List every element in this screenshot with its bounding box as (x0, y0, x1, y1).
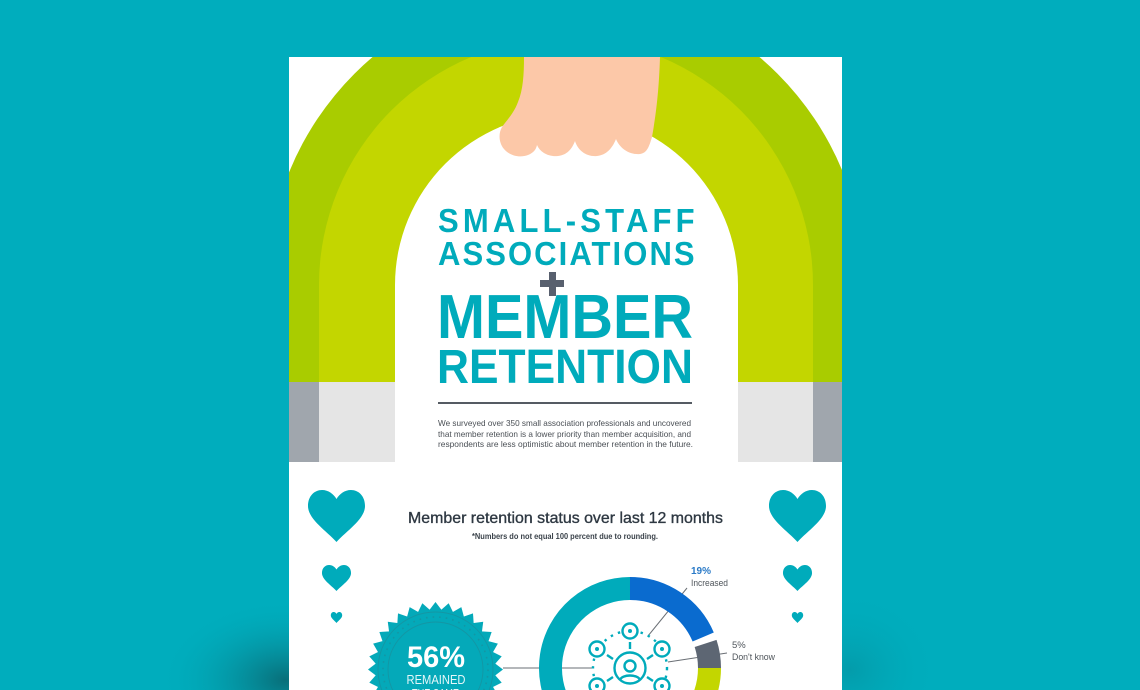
segment: increased 19% (630, 588, 703, 637)
segment: remained the same (550, 588, 630, 690)
intro paragraph (438, 419, 693, 449)
intro paragraph: that member retention is a lower priority than member acquisition, and (438, 430, 691, 439)
hearts left (308, 490, 365, 623)
magnet left tip (289, 382, 395, 462)
badge caption: REMAINED (406, 673, 466, 687)
badge: 56% remained the same (368, 602, 503, 690)
intro paragraph: respondents are less optimistic about member retention in the future. (438, 440, 693, 449)
divider rule (438, 402, 692, 404)
title line: associations: ASSOCIATIONS (438, 235, 695, 272)
icon: member network (590, 624, 670, 690)
magnet hollow (395, 126, 738, 382)
donut chart (550, 588, 710, 690)
connector lines (503, 588, 727, 668)
label: 5% don't know (732, 640, 775, 662)
label: 5% don't know: Don't know (732, 652, 775, 662)
segment: don't know 5% (706, 643, 710, 668)
page shadow right (760, 590, 940, 690)
label: 19% increased: Increased (691, 578, 728, 588)
label: 5% don't know: 5% (732, 640, 746, 651)
magnet outer arc (289, 57, 842, 382)
magnet right tip (738, 382, 842, 462)
label: 19% increased: 19% (691, 566, 711, 577)
title (437, 202, 695, 394)
footnote: *Numbers do not equal 100 percent due to rounding. (472, 532, 658, 541)
title line: retention: RETENTION (437, 341, 693, 394)
label: 19% increased (691, 566, 728, 588)
section heading: Member retention status over last 12 months (408, 510, 723, 527)
badge value: 56% (407, 641, 465, 674)
magnet illustration (289, 57, 842, 462)
magnet inner arc (319, 38, 813, 382)
hand (500, 57, 660, 156)
segment: decreased (694, 668, 721, 690)
page (289, 57, 842, 690)
plus sign (540, 272, 564, 296)
intro paragraph: We surveyed over 350 small association professionals and uncovered (438, 419, 691, 428)
title line: member: MEMBER (437, 283, 693, 352)
page shadow left (160, 600, 410, 690)
title line: small-staff: SMALL-STAFF (438, 202, 695, 239)
hearts right (769, 490, 826, 623)
